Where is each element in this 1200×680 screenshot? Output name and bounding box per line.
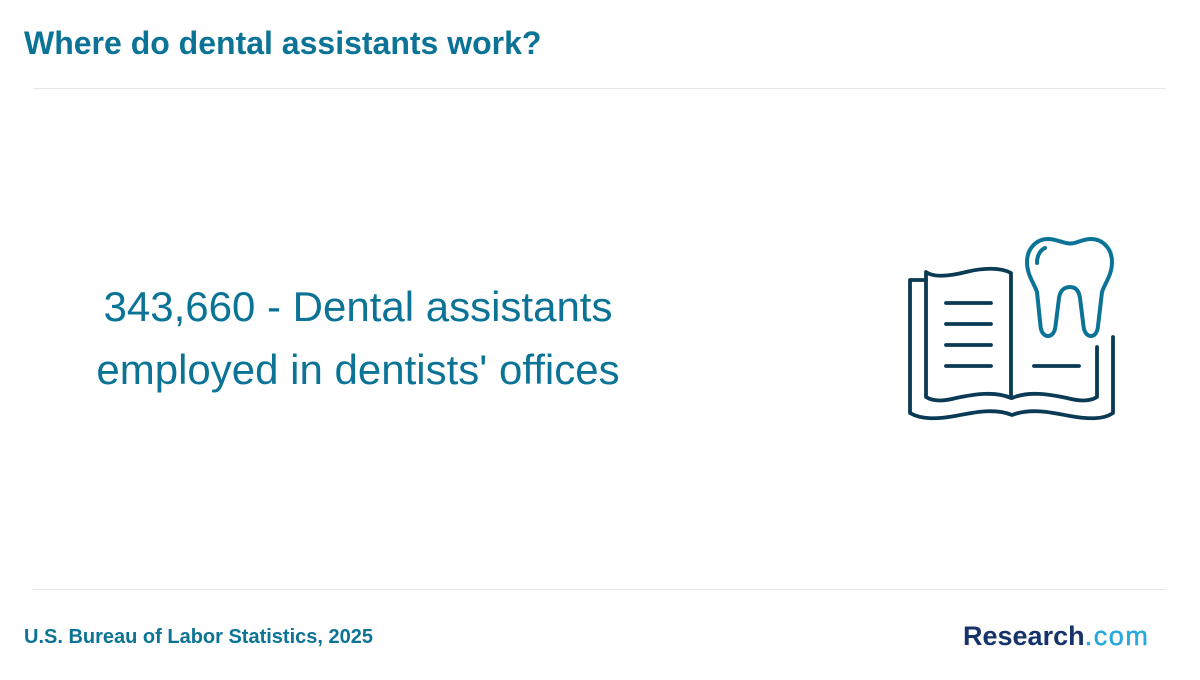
main statistic text: 343,660 - Dental assistants <box>104 283 612 330</box>
main statistic text: employed in dentists' offices <box>96 346 620 393</box>
title: Where do dental assistants work? <box>24 25 541 61</box>
source note: U.S. Bureau of Labor Statistics, 2025 <box>24 626 373 648</box>
main statistic text <box>96 283 620 393</box>
icon: tooth <box>1027 239 1112 336</box>
logo: Research.com: Research.com <box>963 621 1150 651</box>
icon: book <box>910 269 1113 418</box>
